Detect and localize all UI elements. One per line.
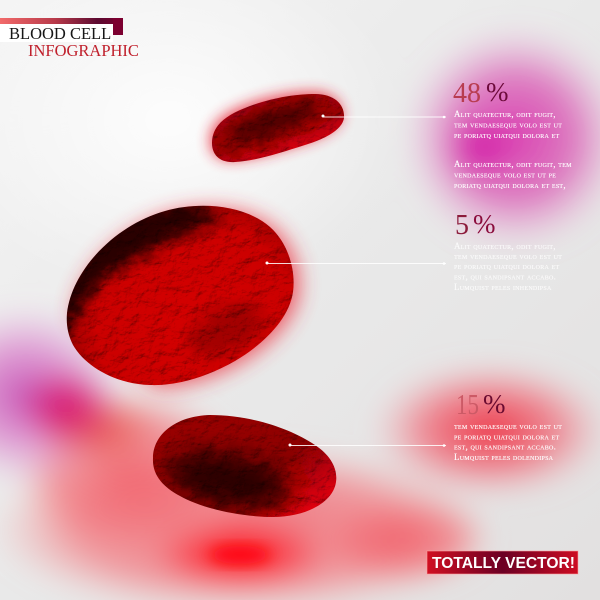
callout: 15 percent [288, 389, 562, 462]
callout: 5 percent: tem vendaeseque volo est ut [454, 251, 562, 261]
callout: 5 percent: est, qui sandipsant accabo. [454, 272, 556, 282]
cell: top [212, 94, 344, 162]
title: blood cell infographic [0, 18, 139, 60]
callout: 5 percent: Alit quatectur, odit fugit, [454, 241, 556, 251]
callout: 15 percent: tem vendaeseque volo est ut [454, 421, 562, 431]
callout: 5 percent: % [473, 209, 496, 239]
callout: 5 percent: pe poriatq uiatqui dolora et [454, 261, 559, 271]
callout: 48 percent: Alit quatectur, odit fugit, [454, 109, 556, 119]
callout: 15 percent: % [483, 389, 506, 419]
callout: 48 percent: tem vendaeseque volo est ut [454, 120, 562, 130]
callout: 48 percent: 48 [453, 78, 481, 109]
title: blood cell infographic: BLOOD CELL [9, 24, 111, 43]
callout: 48 percent: pe poriatq uiatqui dolora et [454, 130, 559, 140]
callout: 48 percent [322, 77, 572, 190]
callout: 48 percent: vendaeseque volo est ut pe [454, 170, 556, 180]
cell: middle [66, 206, 294, 386]
callout: 5 percent [266, 209, 562, 292]
title: blood cell infographic: INFOGRAPHIC [28, 41, 139, 60]
callout: 48 percent: Alit quatectur, odit fugit, tem [454, 159, 572, 169]
badge: totally vector: TOTALLY VECTOR! [432, 555, 575, 572]
callout: 48 percent: poriatq uiatqui dolora et est, [454, 180, 566, 190]
callout: 15 percent: est, qui sandipsant accabo. [454, 442, 556, 452]
callout: 15 percent: Lumquist peles dolendipsa [454, 452, 554, 462]
callout: 15 percent: 15 [456, 390, 479, 421]
callout: 48 percent: % [486, 77, 508, 107]
callout: 15 percent: pe poriatq uiatqui dolora et [454, 432, 559, 442]
callout: 5 percent: 5 [455, 210, 469, 241]
cell: bottom [152, 415, 336, 517]
callout: 5 percent: Lumquist peles inhendipsa [454, 282, 552, 292]
